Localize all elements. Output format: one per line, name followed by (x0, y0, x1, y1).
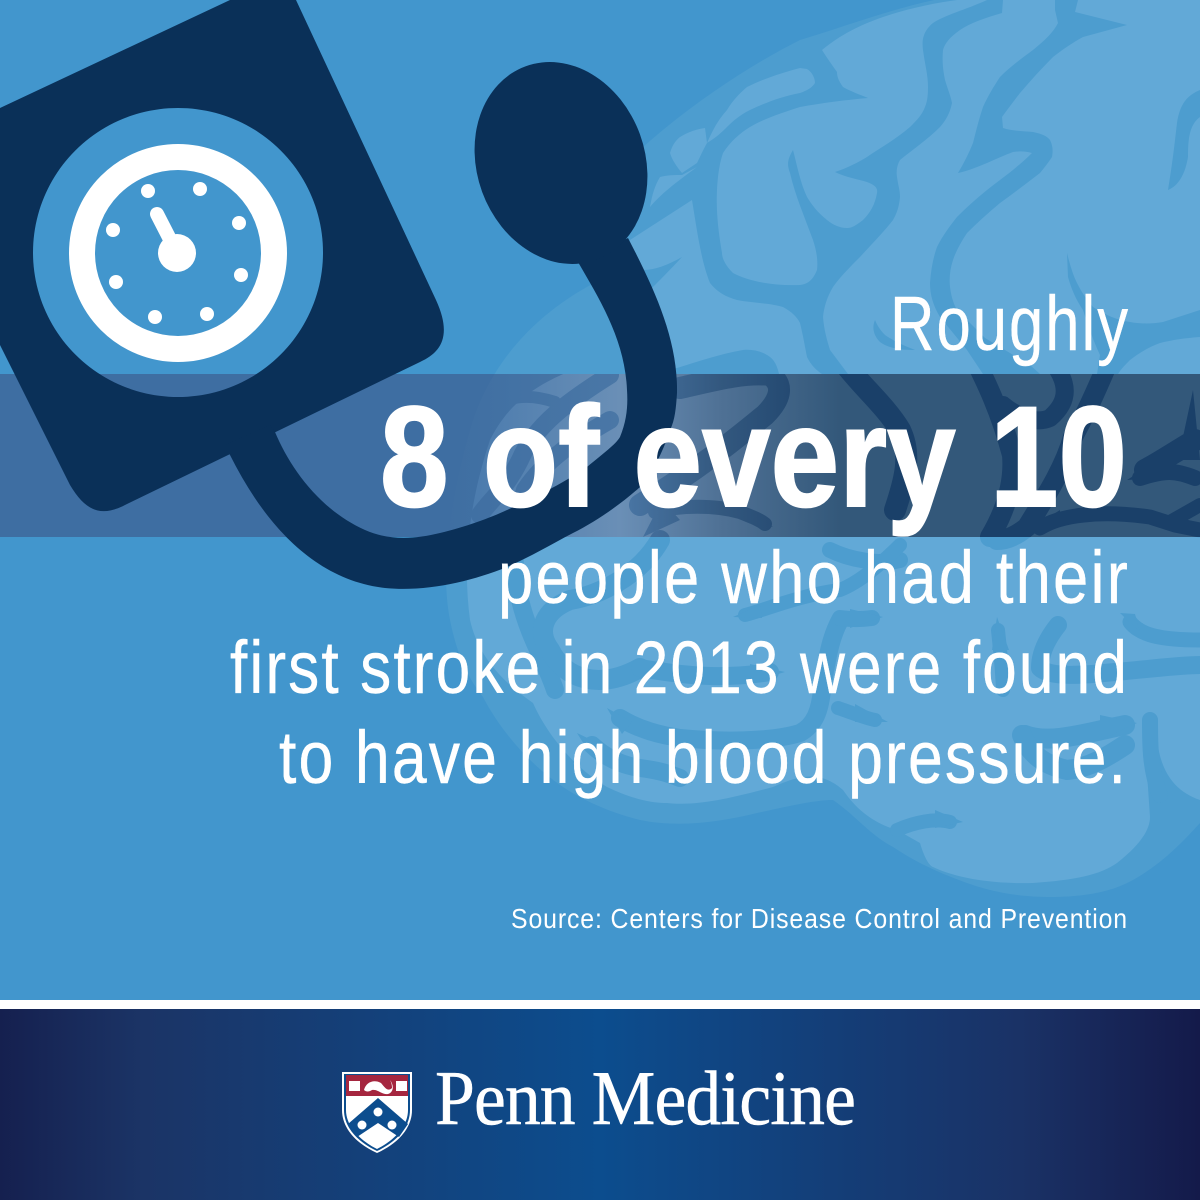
dark horizontal band (0, 374, 1200, 537)
text: Roughly: Roughly (890, 281, 1130, 367)
source note: Source: Centers for Disease Control and Prevention (511, 903, 1128, 934)
cuff body (0, 0, 444, 511)
gauge dial (82, 157, 274, 349)
white divider and footer band (0, 1000, 1200, 1200)
wordmark: Penn Medicine (435, 1055, 855, 1141)
body text (230, 536, 1130, 799)
hose (225, 238, 677, 589)
icon: Penn shield (342, 1072, 412, 1153)
brain watermark (446, 0, 1200, 897)
logo: Penn Medicine (342, 1055, 855, 1153)
squeeze bulb (447, 37, 675, 289)
icon: blood pressure cuff with gauge and bulb (0, 0, 677, 589)
